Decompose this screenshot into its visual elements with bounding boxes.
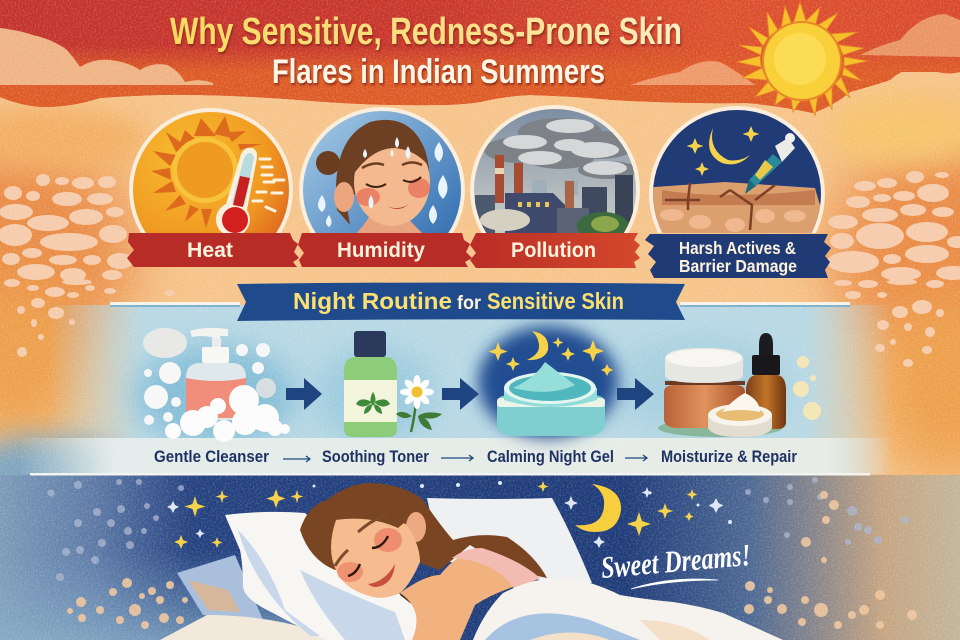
step 2 icon: soothing toner — [344, 331, 442, 437]
red sky — [0, 0, 960, 113]
icon: crescent moon — [709, 128, 750, 164]
back pillow — [427, 498, 592, 583]
shaded hair under chin — [400, 575, 432, 620]
step labels: Calming Night Gel — [487, 447, 614, 466]
icon: dropper — [745, 133, 795, 194]
bottom left blanket — [160, 615, 340, 640]
middle blue band — [0, 305, 960, 473]
heading banner: night routine: Sensitive Skin — [487, 288, 624, 314]
text: sweet dreams — [600, 537, 752, 589]
right cheek — [337, 562, 363, 582]
blanket shadow — [485, 613, 640, 640]
banner: heat: Heat — [187, 239, 233, 262]
icon: thermometer — [216, 148, 257, 237]
main pillow — [225, 512, 430, 640]
heading banner: night routine: Night Routine — [293, 288, 452, 314]
banner: heat — [127, 233, 299, 267]
hair — [300, 483, 547, 578]
blanket — [473, 577, 783, 640]
panel: pollution — [470, 105, 640, 233]
left pillow tan patch — [188, 580, 240, 612]
lips — [368, 564, 395, 587]
arrow 3 — [617, 378, 654, 410]
step 1 icon: gentle cleanser — [143, 328, 290, 442]
banner: pollution: Pollution — [511, 239, 596, 262]
blanket highlight — [530, 620, 710, 640]
banner: humidity: Humidity — [337, 239, 425, 262]
panel: humidity — [299, 107, 465, 233]
night band — [0, 475, 960, 640]
left cheek — [374, 528, 402, 552]
arrow 1 — [286, 378, 322, 410]
step labels: Gentle Cleanser — [154, 447, 269, 466]
icon: crescent moon — [575, 484, 621, 532]
stars — [167, 481, 732, 549]
step 4 icon: moisturize and repair — [658, 333, 821, 437]
arrow 2 — [442, 378, 479, 410]
step 3 icon: calming night gel — [478, 326, 618, 438]
title — [170, 11, 682, 91]
banner: pollution — [470, 233, 640, 268]
closed eyes — [348, 536, 388, 576]
banner: humidity — [298, 233, 472, 267]
pink top — [452, 548, 540, 590]
hairline — [335, 510, 405, 528]
title: Flares in Indian Summers — [272, 53, 605, 91]
icon: stars — [686, 126, 760, 176]
illustration: sleeping woman — [160, 483, 783, 640]
face — [331, 512, 420, 598]
skin cell pattern left — [0, 174, 175, 357]
title: Why Sensitive, Redness-Prone Skin — [170, 11, 682, 53]
left lower pillow — [177, 555, 263, 620]
pillow shadows — [238, 530, 405, 640]
skin cell pattern right — [827, 171, 960, 367]
step labels — [154, 447, 797, 466]
step labels: Soothing Toner — [322, 447, 429, 466]
neck and shoulder — [400, 553, 513, 640]
panel: heat — [129, 108, 293, 233]
heading banner: night routine — [237, 282, 685, 321]
heading banner: night routine: for — [457, 293, 482, 314]
night sky dot field — [48, 477, 917, 635]
ear — [406, 512, 426, 542]
panel: harsh actives — [649, 106, 825, 233]
text: sweet dreams: Sweet Dreams! — [600, 537, 752, 585]
banner: harsh actives and barrier damage: Barrier Damage — [679, 256, 797, 276]
brows — [335, 514, 388, 566]
banner: harsh actives and barrier damage: Harsh Actives & — [679, 238, 796, 258]
banner: harsh actives and barrier damage — [645, 234, 831, 278]
icon: sun top right — [737, 2, 868, 116]
step labels: Moisturize & Repair — [661, 447, 797, 466]
